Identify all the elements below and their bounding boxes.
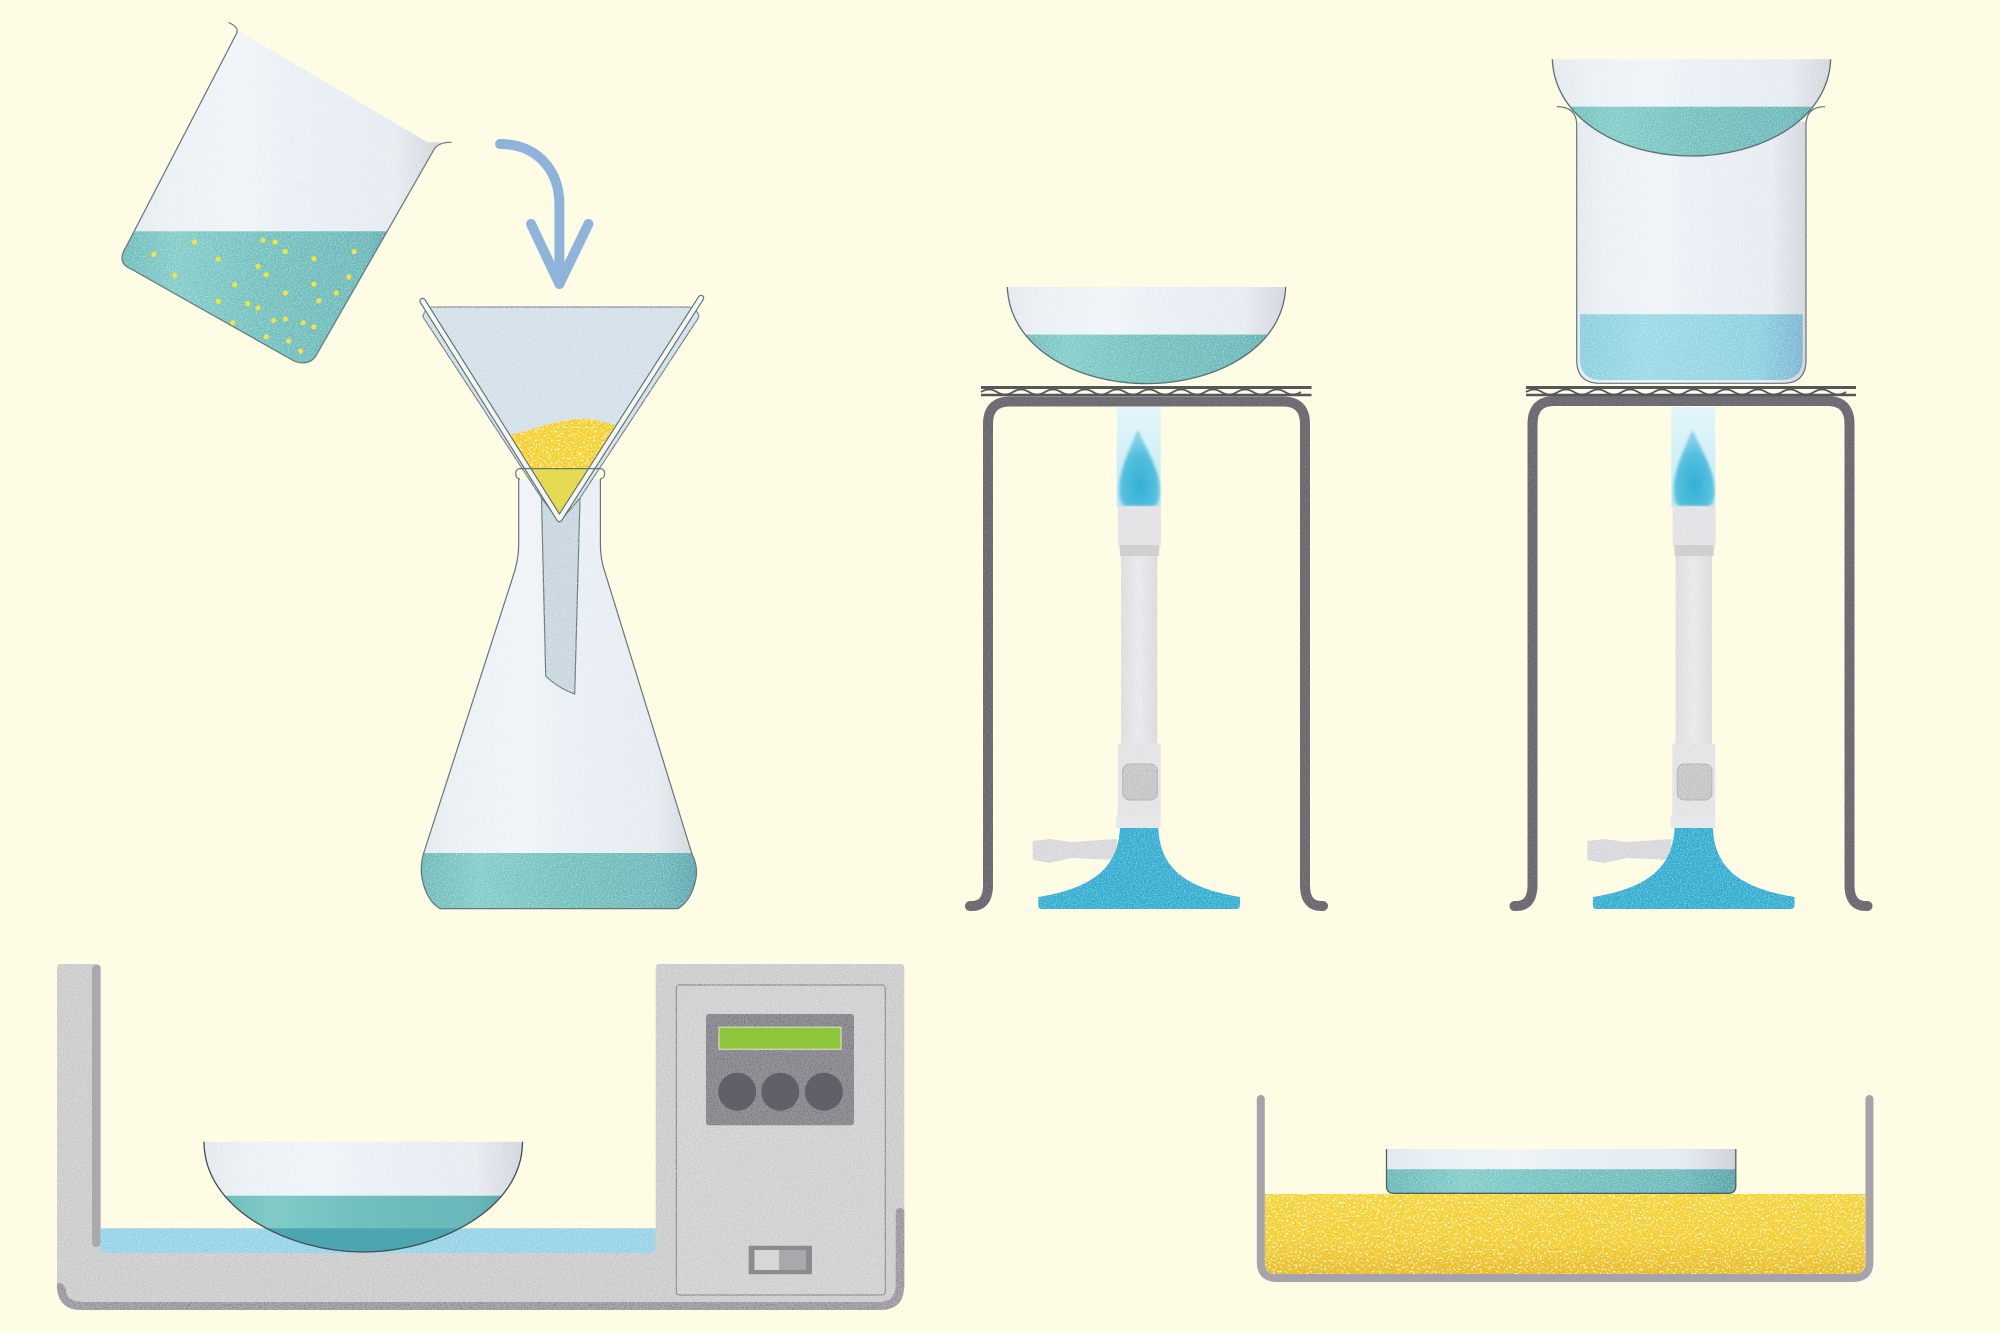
evaporating dish <box>1005 287 1290 385</box>
wire gauze <box>1526 388 1856 395</box>
inner wall shadow <box>92 965 101 1247</box>
knob right <box>805 1073 843 1111</box>
conical flask <box>415 479 705 913</box>
display <box>719 1027 841 1049</box>
dish glass <box>204 1142 522 1252</box>
beaker water bath <box>1557 107 1825 383</box>
funnel stem <box>542 498 580 694</box>
dish outline <box>1386 1149 1736 1193</box>
beaker glass <box>1577 122 1806 383</box>
beaker outline <box>1557 107 1825 383</box>
funnel with filter paper and residue <box>423 298 701 694</box>
collar band <box>1116 816 1161 828</box>
flask outline <box>421 479 696 909</box>
panel: pouring and filtration <box>110 22 705 913</box>
burner tube <box>1121 550 1157 745</box>
control block <box>706 1014 854 1125</box>
power switch <box>749 1246 812 1274</box>
beaker liquid <box>122 231 386 362</box>
knob middle <box>761 1073 799 1111</box>
panel: evaporating dish heated on tripod <box>970 287 1323 909</box>
tray <box>1261 1099 1869 1278</box>
residue seen through flask neck <box>528 469 591 514</box>
dish glass <box>1386 1149 1736 1193</box>
tripod stand <box>970 402 1323 906</box>
bath water <box>101 1228 656 1253</box>
filter paper <box>423 298 701 519</box>
beaker glass <box>122 30 442 363</box>
knob left <box>718 1073 756 1111</box>
lower collar <box>1672 744 1715 816</box>
heat glow <box>1671 407 1715 507</box>
funnel body <box>423 307 699 522</box>
front panel <box>676 985 885 1295</box>
arrow: pour into funnel <box>500 144 588 284</box>
water bath casing <box>57 964 904 1310</box>
burner base <box>1593 828 1795 909</box>
top collar <box>1118 506 1161 556</box>
dish glass <box>1007 287 1286 384</box>
sand <box>1265 1194 1865 1274</box>
base shadow <box>57 1208 904 1310</box>
flame <box>1674 430 1715 506</box>
burner base <box>1038 828 1240 909</box>
dish outline <box>1007 287 1286 384</box>
bunsen burner <box>1587 407 1795 909</box>
collar shadow <box>1675 545 1714 556</box>
air window <box>1123 764 1157 800</box>
dish liquid <box>1386 1169 1736 1193</box>
top collar <box>1673 506 1716 556</box>
beaker outline <box>122 22 452 363</box>
boiling water <box>1580 314 1803 380</box>
shallow dish <box>1386 1149 1736 1193</box>
burner tube <box>1676 550 1712 745</box>
particles <box>151 238 357 354</box>
evaporating dish in bath <box>200 1142 525 1253</box>
control tower <box>676 985 885 1295</box>
dish liquid <box>1571 106 1812 156</box>
panel: dish over water-filled beaker heated on tripod <box>1514 59 1868 909</box>
flame <box>1119 430 1160 506</box>
flask rim <box>516 469 605 479</box>
yellow residue <box>509 419 617 514</box>
bunsen burner <box>1033 407 1240 909</box>
tilted beaker with suspended particles <box>110 22 452 371</box>
flask glass <box>421 479 696 909</box>
air window <box>1677 764 1712 800</box>
dish outline <box>204 1142 522 1252</box>
flask filtrate <box>422 853 696 908</box>
dish glass <box>1552 59 1831 156</box>
dish liquid <box>1026 334 1267 383</box>
evaporating dish on beaker <box>1550 59 1835 159</box>
wire gauze <box>981 388 1312 395</box>
panel: electric water bath <box>57 964 904 1310</box>
panel: sand bath <box>1261 1099 1869 1278</box>
collar band <box>1671 816 1715 828</box>
tripod stand <box>1514 401 1868 906</box>
heat glow <box>1117 407 1161 507</box>
burner pipe <box>1587 839 1671 863</box>
collar shadow <box>1120 545 1159 556</box>
submerged liquid <box>268 1228 458 1252</box>
lower collar <box>1118 744 1161 816</box>
dish liquid <box>226 1196 501 1228</box>
dish outline <box>1552 59 1831 156</box>
burner pipe <box>1033 839 1117 863</box>
